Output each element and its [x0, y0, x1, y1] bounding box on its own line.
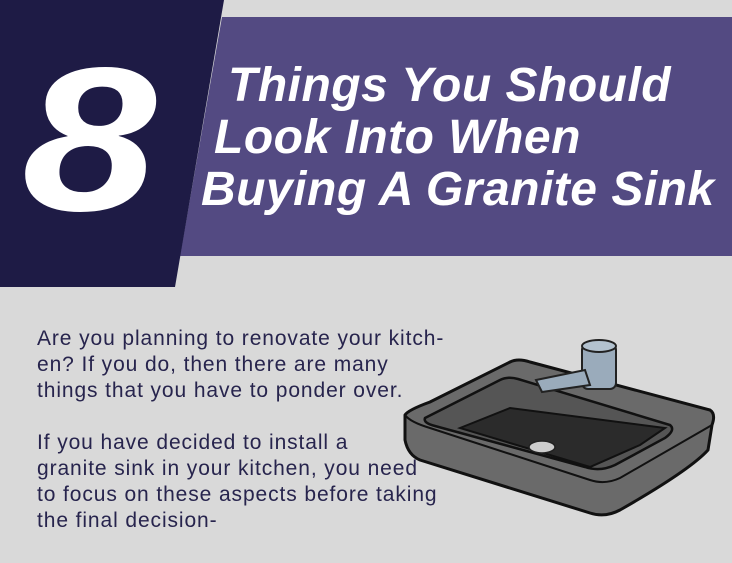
- intro text: [37, 327, 444, 532]
- big number 8: 8: [22, 25, 157, 254]
- intro text: en? If you do, then there are many: [37, 353, 389, 376]
- intro text: Are you planning to renovate your kitch-: [37, 327, 444, 350]
- navy block: [0, 0, 224, 287]
- intro text: things that you have to ponder over.: [37, 379, 403, 402]
- icon: granite sink: [404, 339, 716, 516]
- header background: [0, 0, 732, 287]
- title: Buying A Granite Sink: [201, 163, 715, 216]
- intro text: the final decision-: [37, 509, 218, 532]
- intro text: granite sink in your kitchen, you need: [37, 457, 418, 480]
- title: Things You Should: [228, 59, 671, 112]
- title: [201, 59, 716, 216]
- purple band: [180, 17, 732, 256]
- title: Look Into When: [214, 111, 581, 164]
- intro text: to focus on these aspects before taking: [37, 483, 438, 506]
- faucet: [536, 340, 616, 392]
- intro text: If you have decided to install a: [37, 431, 348, 454]
